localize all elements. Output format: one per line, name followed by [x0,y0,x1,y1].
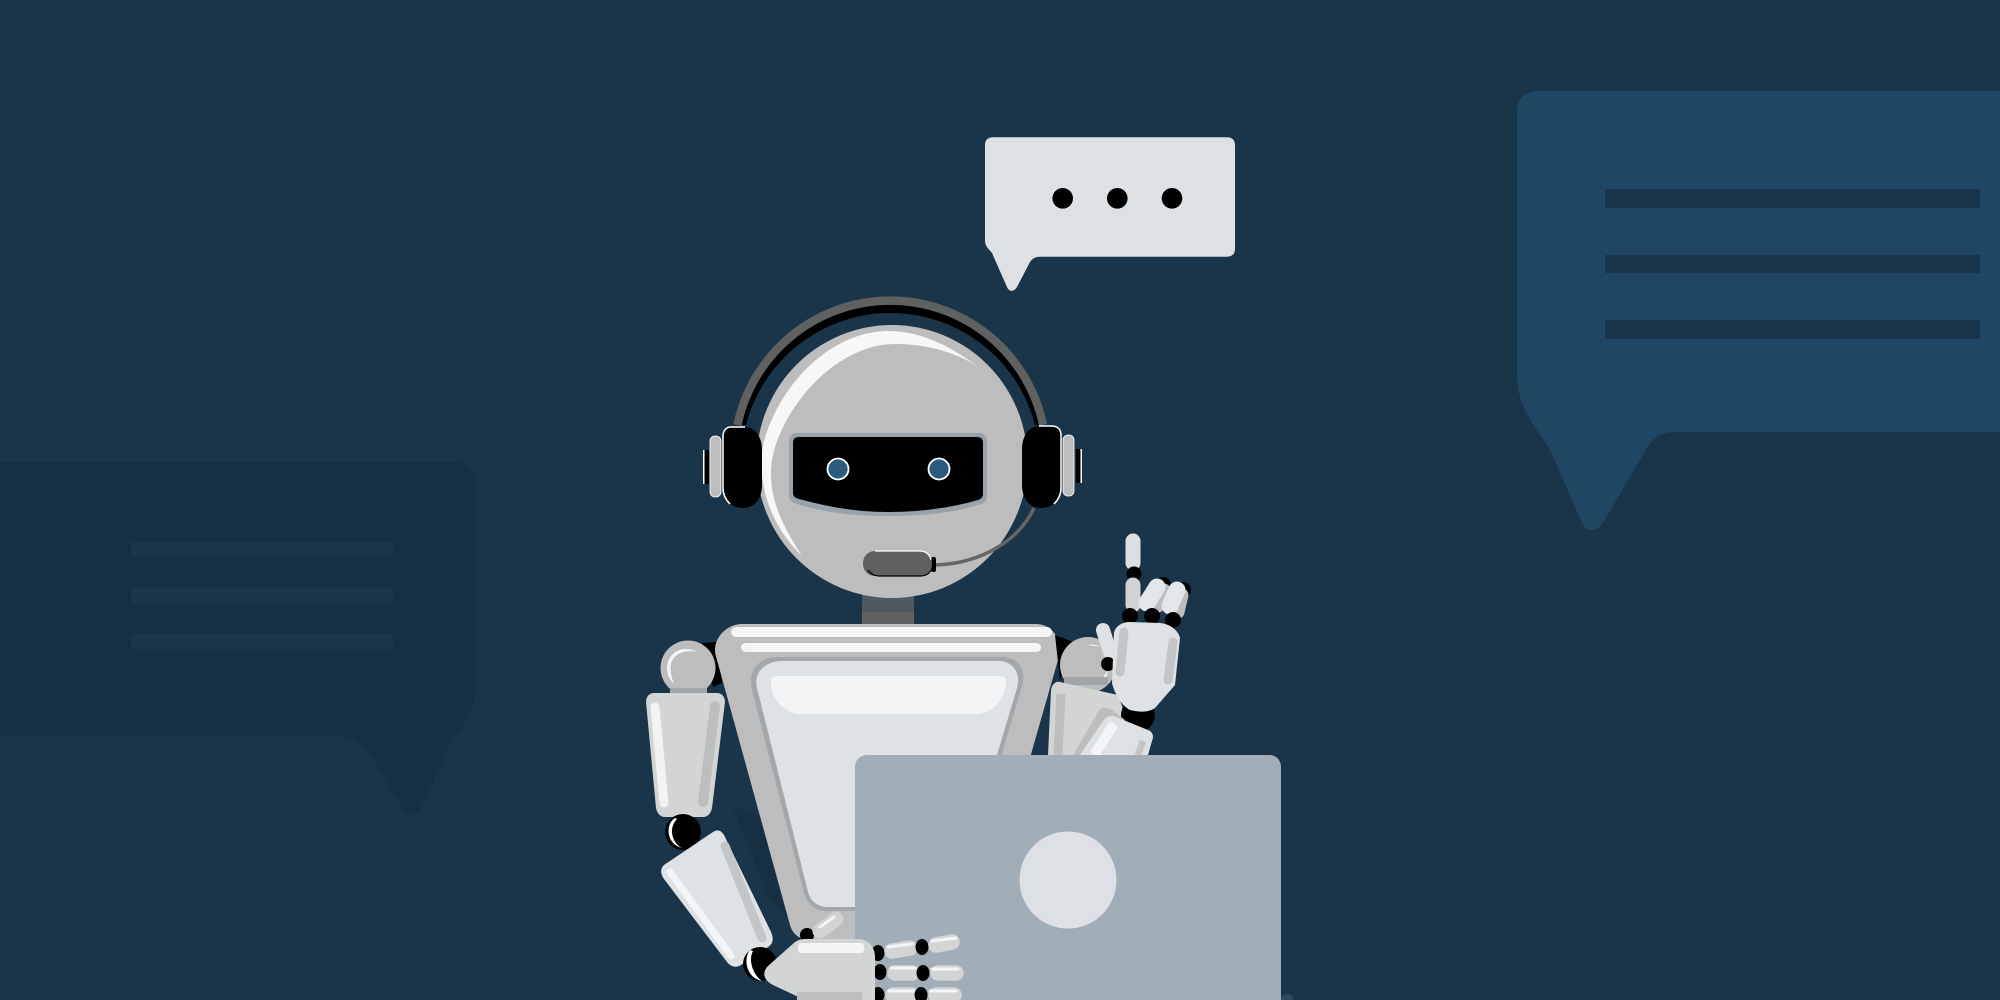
left hand fingers [800,917,958,1000]
head highlight [762,331,977,556]
left forearm [661,830,773,967]
left shoulder joint [660,640,722,696]
right forearm [1073,708,1153,755]
right hand fingers [1101,541,1191,671]
left upper arm [646,693,725,817]
headband [738,301,1043,425]
thumb [1103,630,1110,652]
right wrist joint [1121,698,1155,732]
bottom finger [872,987,884,1000]
middle finger [1155,577,1171,593]
laptop [855,755,1281,1000]
head sphere [756,325,1028,598]
head [703,301,1082,598]
small speech bubble with dots [985,137,1235,291]
right shoulder joint [1055,635,1116,693]
background speech bubble: right [1517,91,2000,530]
neck [862,590,914,626]
chest highlight [771,676,1006,714]
eye right [928,458,950,480]
shadow below laptop corner [1281,994,1293,1000]
ring finger [1175,582,1191,598]
left hand palm [743,939,875,1000]
left earcup [703,427,762,508]
shadow between arm and torso [733,807,790,920]
left elbow joint [665,814,701,850]
thumb [800,928,814,942]
background speech bubble: left [0,462,476,815]
right upper arm [1048,682,1140,755]
index finger [1126,541,1140,563]
chest panel [751,657,1023,911]
robot [646,301,1293,1000]
microphone [863,508,1034,576]
right earcup [1022,426,1082,508]
right hand palm [1112,622,1180,712]
torso [715,624,1060,940]
middle finger [874,964,886,980]
top finger [872,945,884,961]
eye left [828,458,848,480]
visor [789,433,987,516]
